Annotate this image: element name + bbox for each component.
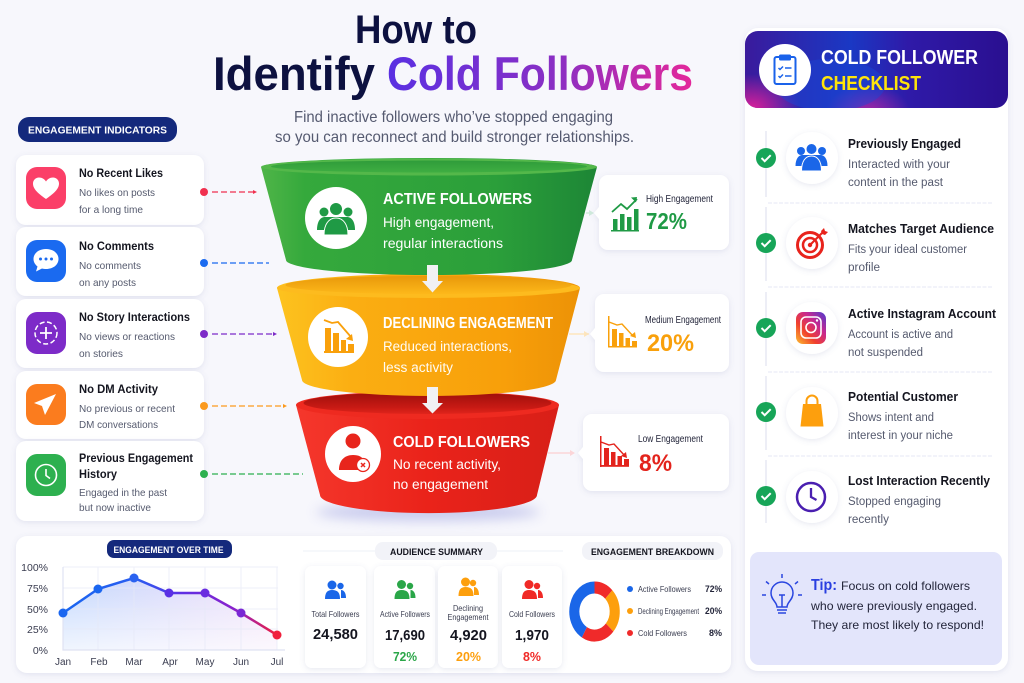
checklist item: previously engaged: content in the past bbox=[848, 177, 944, 189]
subtitle: so you can reconnect and build stronger relationships. bbox=[275, 129, 634, 146]
heading: engagement breakdown bbox=[582, 542, 723, 560]
checklist item: matches target audience: Fits your ideal customer bbox=[848, 244, 967, 256]
stat card: total followers: Total Followers bbox=[312, 609, 360, 619]
card: no dm activity: No DM Activity bbox=[79, 382, 158, 396]
card: high engagement: 72% bbox=[646, 208, 687, 234]
stat card: active followers bbox=[374, 566, 435, 668]
funnel tier: cold followers: COLD FOLLOWERS bbox=[393, 434, 530, 451]
subtitle: Find inactive followers who’ve stopped engaging bbox=[294, 109, 613, 126]
heading: engagement indicators bbox=[18, 117, 177, 142]
checklist header: COLD FOLLOWER bbox=[821, 47, 978, 69]
funnel bbox=[261, 158, 597, 521]
stat card: declining engagement: 4,920 bbox=[450, 627, 487, 644]
checklist item: matches target audience: Matches Target Audience bbox=[848, 221, 994, 236]
connector: dm bbox=[200, 402, 287, 410]
funnel tier: active followers: ACTIVE FOLLOWERS bbox=[383, 191, 532, 208]
title: Cold Followers bbox=[387, 47, 693, 100]
donut legend: Declining Engagement bbox=[638, 606, 699, 616]
heading: engagement indicators: ENGAGEMENT INDICATORS bbox=[28, 124, 167, 136]
panel: engagement indicators bbox=[16, 117, 204, 521]
stat card: active followers: 72% bbox=[393, 649, 417, 664]
connector: likes bbox=[200, 188, 257, 196]
card: no recent likes: No Recent Likes bbox=[79, 166, 163, 180]
funnel tier: active followers: regular interactions bbox=[383, 236, 503, 251]
donut legend: 20% bbox=[705, 606, 722, 617]
card: no story interactions bbox=[16, 299, 204, 368]
checklist item: active instagram account: not suspended bbox=[848, 347, 923, 359]
checklist item: active instagram account: Account is active and bbox=[848, 329, 953, 341]
title bbox=[213, 8, 693, 100]
card: no comments bbox=[16, 227, 204, 296]
connector: history bbox=[200, 470, 303, 478]
heading: engagement over time: ENGAGEMENT OVER TIME bbox=[114, 545, 224, 556]
funnel tier: cold followers: no engagement bbox=[393, 477, 488, 492]
stat card: declining engagement: Declining bbox=[453, 603, 483, 613]
donut legend: Cold Followers bbox=[638, 628, 687, 638]
line chart: May bbox=[196, 657, 214, 668]
checklist item: active instagram account bbox=[756, 302, 997, 359]
donut chart bbox=[574, 587, 615, 636]
stat card: total followers bbox=[305, 566, 366, 668]
checklist header bbox=[745, 31, 1008, 108]
icon: clipboard bbox=[759, 44, 811, 96]
card: no story interactions: on stories bbox=[79, 348, 123, 360]
line chart: Mar bbox=[125, 657, 143, 668]
card: low engagement: Low Engagement bbox=[638, 434, 703, 445]
card: no recent likes: for a long time bbox=[79, 204, 143, 216]
card: no recent likes: No likes on posts bbox=[79, 187, 155, 199]
donut legend bbox=[627, 584, 723, 639]
checklist item: potential customer bbox=[756, 387, 958, 442]
heading: audience summary bbox=[375, 542, 497, 560]
card: high engagement: High Engagement bbox=[646, 194, 713, 205]
funnel tier: cold followers bbox=[296, 391, 559, 513]
arrow: active to declining bbox=[422, 265, 443, 292]
funnel tier: declining engagement bbox=[277, 274, 580, 396]
arrow: declining to cold bbox=[422, 387, 443, 414]
line chart: 75% bbox=[27, 583, 48, 595]
card: previous engagement history: History bbox=[79, 467, 117, 481]
heading: audience summary: AUDIENCE SUMMARY bbox=[390, 547, 484, 558]
line chart bbox=[21, 562, 285, 668]
checklist item: potential customer: interest in your niche bbox=[848, 430, 953, 442]
heading: engagement breakdown: ENGAGEMENT BREAKDOWN bbox=[591, 547, 714, 558]
checklist item: previously engaged: Previously Engaged bbox=[848, 136, 961, 151]
checklist item: active instagram account: Active Instagram Account bbox=[848, 306, 997, 321]
checklist item: potential customer: Shows intent and bbox=[848, 412, 934, 424]
line chart: Jan bbox=[55, 657, 71, 668]
card: low engagement: 8% bbox=[639, 450, 672, 477]
card: no dm activity: No previous or recent bbox=[79, 403, 175, 415]
connector: story bbox=[200, 330, 277, 338]
checklist item: potential customer: Potential Customer bbox=[848, 389, 958, 404]
panel: checklist bbox=[744, 31, 1009, 674]
card: low engagement bbox=[548, 414, 729, 491]
stat card: cold followers bbox=[502, 566, 562, 668]
card: previous engagement history: but now inactive bbox=[79, 502, 151, 514]
donut legend: Active Followers bbox=[638, 584, 691, 594]
dividers bbox=[768, 203, 992, 456]
stat card: active followers: Active Followers bbox=[380, 609, 430, 619]
timeline rail bbox=[765, 131, 767, 523]
card: previous engagement history bbox=[16, 441, 204, 521]
line chart: Feb bbox=[90, 657, 108, 668]
connector: comments bbox=[200, 259, 269, 267]
tip box: They are most likely to respond! bbox=[811, 618, 984, 632]
line chart: 100% bbox=[21, 562, 48, 574]
line chart: 25% bbox=[27, 624, 48, 636]
panel: bottom dashboard bbox=[16, 536, 731, 673]
card: no dm activity: DM conversations bbox=[79, 419, 158, 431]
checklist item: lost interaction recently bbox=[756, 471, 991, 526]
tip box bbox=[750, 552, 1002, 665]
card: previous engagement history: Previous Engagement bbox=[79, 451, 193, 465]
funnel tier: active followers: High engagement, bbox=[383, 215, 494, 230]
tip box: who were previously engaged. bbox=[810, 599, 977, 613]
funnel tier: declining engagement: DECLINING ENGAGEMENT bbox=[383, 315, 553, 332]
checklist item: previously engaged: Interacted with your bbox=[848, 159, 950, 171]
tip box: Focus on cold followers bbox=[841, 579, 970, 593]
card: no comments: on any posts bbox=[79, 277, 136, 289]
donut legend: 72% bbox=[705, 584, 722, 595]
donut legend: 8% bbox=[709, 628, 723, 639]
heading: engagement over time bbox=[107, 540, 232, 558]
checklist item: lost interaction recently: Stopped engaging bbox=[848, 496, 941, 508]
card: no comments: No Comments bbox=[79, 239, 154, 253]
line chart: 0% bbox=[33, 645, 48, 657]
line chart: 50% bbox=[27, 604, 48, 616]
stat card: active followers: 17,690 bbox=[385, 627, 425, 644]
card: no comments: No comments bbox=[79, 260, 141, 272]
card: no story interactions: No views or reactions bbox=[79, 331, 175, 343]
stat card: declining engagement bbox=[438, 566, 498, 668]
title: How to bbox=[355, 8, 477, 52]
funnel tier: cold followers: No recent activity, bbox=[393, 457, 501, 472]
checklist item: matches target audience: profile bbox=[848, 262, 880, 274]
subtitle bbox=[275, 109, 634, 146]
stat card: total followers: 24,580 bbox=[313, 626, 358, 643]
checklist item: previously engaged bbox=[756, 132, 961, 189]
stat card: declining engagement: 20% bbox=[456, 649, 481, 664]
line chart: Apr bbox=[162, 657, 178, 668]
card: medium engagement: Medium Engagement bbox=[645, 315, 721, 326]
line chart: Jun bbox=[233, 657, 249, 668]
checklist item: lost interaction recently: recently bbox=[848, 514, 889, 526]
stat card: declining engagement: Engagement bbox=[448, 612, 489, 622]
checklist item: lost interaction recently: Lost Interaction Recently bbox=[848, 473, 991, 488]
stat card: cold followers: 8% bbox=[523, 649, 541, 664]
funnel tier: declining engagement: Reduced interactions, bbox=[383, 339, 512, 354]
funnel tier: active followers bbox=[261, 158, 597, 275]
tip box: Tip: bbox=[811, 577, 837, 594]
card: no story interactions: No Story Interactions bbox=[79, 310, 190, 324]
line chart: Jul bbox=[271, 657, 283, 668]
checklist header: CHECKLIST bbox=[821, 73, 921, 95]
card: previous engagement history: Engaged in the past bbox=[79, 487, 167, 499]
title: Identify bbox=[213, 47, 375, 100]
funnel tier: declining engagement: less activity bbox=[383, 360, 453, 375]
card: medium engagement: 20% bbox=[647, 330, 694, 357]
stat card: cold followers: Cold Followers bbox=[509, 609, 555, 619]
card: no recent likes bbox=[16, 155, 204, 225]
card: high engagement bbox=[586, 175, 729, 250]
stat card: cold followers: 1,970 bbox=[515, 627, 549, 644]
card: no dm activity bbox=[16, 371, 204, 439]
checklist item: matches target audience bbox=[756, 217, 994, 274]
card: medium engagement bbox=[569, 294, 729, 372]
icon: light bulb bbox=[762, 574, 802, 613]
funnel shadow bbox=[316, 503, 540, 521]
